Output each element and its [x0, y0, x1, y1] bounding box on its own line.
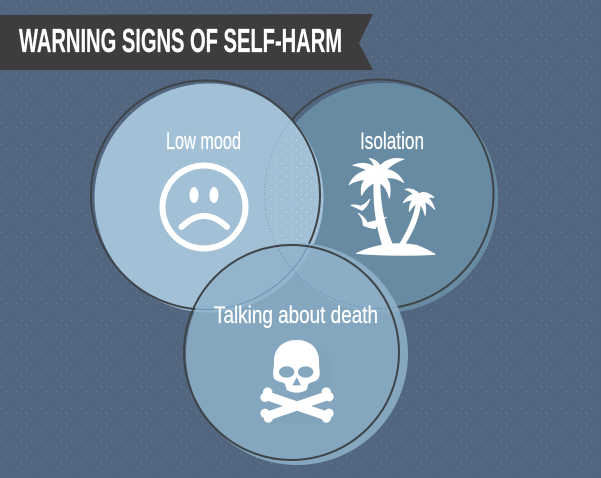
icon: palm trees island with birds	[349, 158, 435, 255]
title: WARNING SIGNS OF SELF-HARM	[19, 22, 342, 59]
label: Talking about death: Talking about death	[214, 302, 378, 329]
icon: skull and crossbones	[260, 340, 334, 423]
panel: talking about death circle	[183, 243, 408, 465]
panel: isolation circle	[264, 80, 498, 313]
label: Low mood: Low mood	[166, 128, 241, 155]
banner: title ribbon	[0, 14, 373, 70]
icon: sad face	[162, 166, 246, 248]
panel: low mood circle	[90, 80, 324, 312]
label: Isolation: Isolation	[360, 128, 424, 155]
